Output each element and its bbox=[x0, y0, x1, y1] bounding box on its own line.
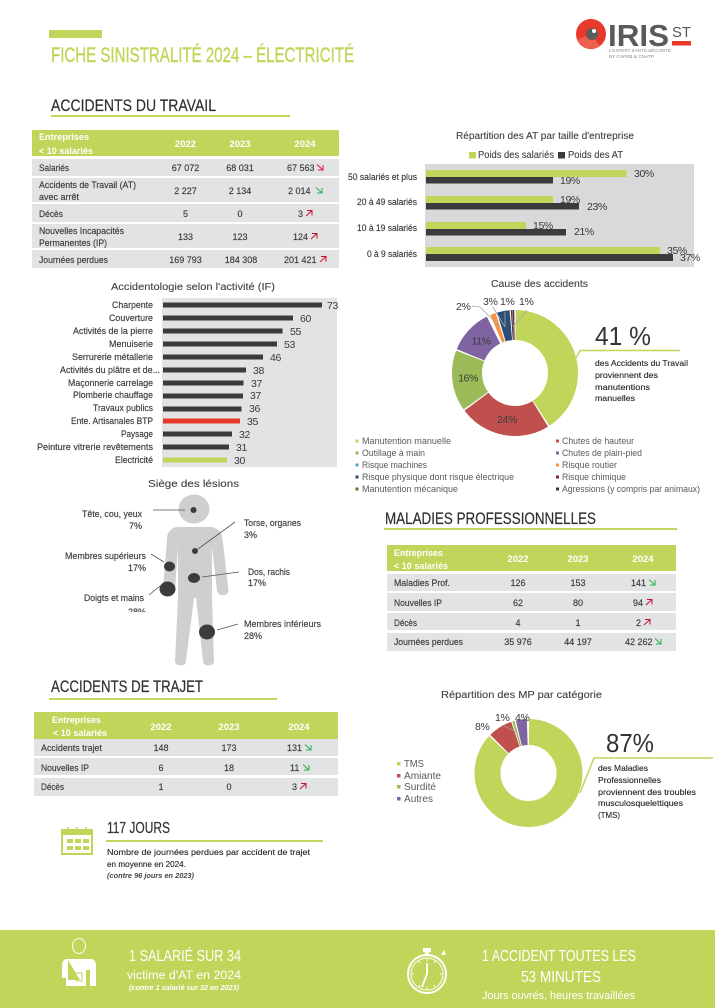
table: accidents du travail: 184 308 bbox=[225, 255, 257, 265]
table: accidents du travail: avec arrêt bbox=[39, 192, 79, 202]
chart: répartition des MP par catégorie: Répartition des MP par catégorie bbox=[441, 690, 602, 701]
chart: répartition des MP par catégorie: 8% bbox=[475, 721, 489, 733]
legend: cause des accidents: Manutention manuelle bbox=[362, 436, 451, 447]
table: maladies professionnelles: 2024 bbox=[632, 554, 654, 565]
heading: maladies professionnelles: MALADIES PROFESSIONNELLES bbox=[385, 510, 596, 528]
table: accidents de trajet: Nouvelles IP bbox=[41, 763, 89, 773]
footer band: 1 SALARIÉ SUR 34 bbox=[129, 946, 241, 965]
chart: cause des accidents: Cause des accidents bbox=[491, 279, 588, 290]
chart: accidentologie selon l'activité: Plomberie chauffage bbox=[73, 390, 153, 400]
diagram: siège des lésions: 28% bbox=[128, 607, 146, 617]
callout: 41 %: des Accidents du Travail bbox=[595, 358, 688, 368]
chart: accidentologie selon l'activité: 60 bbox=[300, 313, 311, 325]
table: maladies professionnelles: 1 bbox=[575, 618, 581, 628]
chart: répartition des AT par taille d'entreprise: 35% bbox=[667, 245, 687, 257]
legend: répartition des MP: Surdité bbox=[404, 781, 436, 793]
table: accidents du travail: 67 072 bbox=[172, 163, 199, 173]
chart: cause des accidents: 1% bbox=[500, 296, 514, 308]
table: accidents du travail: 124 bbox=[293, 232, 308, 242]
table: maladies professionnelles: 141 bbox=[631, 578, 646, 588]
callout: 87%: musculosquelettiques bbox=[598, 798, 683, 808]
chart: répartition des AT par taille d'entreprise bbox=[348, 131, 700, 267]
table: maladies professionnelles: 153 bbox=[570, 578, 586, 588]
legend: cause des accidents: Chutes de hauteur bbox=[562, 436, 634, 447]
footer band: victime d'AT en 2024 bbox=[127, 970, 242, 982]
chart: accidentologie selon l'activité: Travaux publics bbox=[93, 403, 153, 413]
diagram: siège des lésions: Siège des lésions bbox=[148, 479, 239, 490]
table: maladies professionnelles: 44 197 bbox=[564, 637, 592, 647]
legend: cause des accidents: Risque routier bbox=[562, 460, 617, 471]
table: accidents de trajet: Accidents trajet bbox=[41, 743, 102, 753]
table: maladies professionnelles bbox=[387, 545, 676, 651]
icon: stopwatch bbox=[408, 948, 446, 993]
diagram: siège des lésions: Membres inférieurs bbox=[244, 619, 321, 629]
chart: répartition des AT par taille d'entreprise: Poids des salariés bbox=[478, 150, 554, 161]
chart: accidentologie selon l'activité: Menuiserie bbox=[109, 339, 153, 349]
table: accidents du travail: 5 bbox=[183, 209, 188, 219]
table: maladies professionnelles: 80 bbox=[573, 598, 583, 608]
chart: accidentologie selon l'activité: Maçonnerie carrelage bbox=[68, 378, 153, 388]
diagram: siège des lésions: Torse, organes bbox=[244, 518, 301, 528]
table: accidents du travail: 0 bbox=[237, 209, 243, 219]
legend: cause des accidents: Risque physique dont risque électrique bbox=[362, 472, 514, 483]
table: accidents du travail: 133 bbox=[178, 232, 193, 242]
chart: répartition des AT par taille d'entreprise: 30% bbox=[634, 168, 654, 180]
table: maladies professionnelles: Décès bbox=[394, 618, 417, 628]
table: accidents de trajet: 2024 bbox=[288, 722, 310, 733]
legend: répartition des MP: TMS bbox=[404, 758, 424, 770]
diagram: siège des lésions: Tête, cou, yeux bbox=[82, 509, 142, 519]
table: accidents du travail: 2 227 bbox=[174, 186, 197, 196]
chart: répartition des AT par taille d'entreprise: 50 salariés et plus bbox=[348, 172, 417, 182]
chart: répartition des AT par taille d'entreprise: Répartition des AT par taille d'entreprise bbox=[456, 131, 634, 142]
table: accidents du travail: 2024 bbox=[294, 139, 316, 150]
table: accidents de trajet: 131 bbox=[287, 743, 302, 753]
table: maladies professionnelles: 2022 bbox=[507, 554, 529, 565]
callout: 117 jours: 117 JOURS bbox=[107, 820, 170, 837]
table: accidents du travail: Décès bbox=[39, 209, 63, 219]
table: accidents du travail: Entreprises bbox=[39, 132, 89, 143]
table: accidents de trajet bbox=[34, 712, 338, 796]
title bbox=[49, 30, 354, 67]
chart: cause des accidents: 3% bbox=[483, 296, 497, 308]
callout: 87%: proviennent des troubles bbox=[598, 787, 696, 797]
table: accidents de trajet: 2023 bbox=[218, 722, 240, 733]
table: maladies professionnelles: Nouvelles IP bbox=[394, 598, 442, 608]
table: accidents du travail: 169 793 bbox=[169, 255, 202, 265]
table: maladies professionnelles: < 10 salariés bbox=[394, 561, 448, 572]
chart: accidentologie selon l'activité: 30 bbox=[234, 455, 245, 467]
table: accidents du travail: 2 134 bbox=[229, 186, 251, 196]
table: accidents de trajet: 148 bbox=[153, 743, 169, 753]
table: accidents de trajet: Entreprises bbox=[52, 715, 101, 726]
table: accidents du travail bbox=[32, 130, 339, 268]
heading: accidents de trajet: ACCIDENTS DE TRAJET bbox=[51, 678, 203, 696]
chart: répartition des AT par taille d'entreprise: Poids des AT bbox=[568, 150, 623, 161]
callout: 41 %: manuelles bbox=[595, 393, 635, 403]
table: accidents de trajet: 3 bbox=[292, 782, 297, 792]
legend: cause des accidents: Chutes de plain-pied bbox=[562, 448, 642, 459]
callout: 117 jours: en moyenne en 2024. bbox=[107, 859, 186, 869]
chart: répartition des AT par taille d'entreprise: 10 à 19 salariés bbox=[357, 223, 417, 233]
callout: 41 % bbox=[576, 321, 688, 403]
footer band: 1 ACCIDENT TOUTES LES bbox=[482, 948, 636, 965]
diagram: siège des lésions: Dos, rachis bbox=[248, 567, 290, 577]
logo: IRIS ST: IRIS bbox=[608, 18, 669, 53]
chart: accidentologie selon l'activité: 35 bbox=[247, 416, 258, 428]
chart: accidentologie selon l'activité: 37 bbox=[250, 390, 261, 402]
chart: cause des accidents: 24% bbox=[497, 414, 517, 426]
chart: accidentologie selon l'activité: Peinture vitrerie revêtements bbox=[37, 442, 153, 452]
callout: 117 jours: (contre 96 jours en 2023) bbox=[107, 873, 195, 880]
chart: accidentologie selon l'activité: 53 bbox=[284, 339, 295, 351]
table: accidents du travail: Permanentes (IP) bbox=[39, 238, 107, 248]
table: maladies professionnelles: Entreprises bbox=[394, 548, 443, 559]
table: accidents du travail: 2 014 bbox=[288, 186, 311, 196]
table: maladies professionnelles: 2 bbox=[636, 618, 641, 628]
table: maladies professionnelles: 2023 bbox=[567, 554, 589, 565]
logo: IRIS ST bbox=[576, 18, 691, 59]
diagram: siège des lésions: 28% bbox=[244, 631, 262, 641]
chart: répartition des MP par catégorie: 4% bbox=[515, 712, 529, 724]
table: accidents du travail: Journées perdues bbox=[39, 255, 108, 265]
table: accidents du travail: Salariés bbox=[39, 163, 69, 173]
chart: répartition des AT par taille d'entreprise: 19% bbox=[560, 175, 580, 187]
chart: accidentologie selon l'activité: Couverture bbox=[109, 313, 153, 323]
heading: accidents du travail: ACCIDENTS DU TRAVAIL bbox=[51, 97, 216, 115]
chart: accidentologie selon l'activité bbox=[37, 282, 338, 467]
table: maladies professionnelles: 62 bbox=[513, 598, 523, 608]
table: maladies professionnelles: 4 bbox=[515, 618, 521, 628]
table: accidents du travail: 3 bbox=[298, 209, 303, 219]
chart: répartition des AT par taille d'entreprise: 23% bbox=[587, 201, 607, 213]
footer band bbox=[0, 930, 715, 1008]
chart: accidentologie selon l'activité: Electricité bbox=[115, 455, 153, 465]
legend: cause des accidents: Risque machines bbox=[362, 460, 427, 471]
table: accidents du travail: < 10 salariés bbox=[39, 146, 93, 157]
chart: répartition des AT par taille d'entreprise: 15% bbox=[533, 220, 553, 232]
table: accidents de trajet: 18 bbox=[224, 763, 234, 773]
diagram: siège des lésions: 17% bbox=[248, 578, 266, 588]
table: accidents de trajet: 1 bbox=[158, 782, 164, 792]
table: maladies professionnelles: 94 bbox=[633, 598, 643, 608]
legend: répartition des MP: Amiante bbox=[404, 770, 441, 782]
chart: répartition des AT par taille d'entreprise: 0 à 9 salariés bbox=[367, 249, 417, 259]
legend: cause des accidents: Risque chimique bbox=[562, 472, 626, 483]
chart: accidentologie selon l'activité: 31 bbox=[236, 442, 247, 454]
table: accidents de trajet: 0 bbox=[226, 782, 232, 792]
chart: accidentologie selon l'activité: 73 bbox=[327, 300, 338, 312]
chart: cause des accidents bbox=[456, 279, 588, 426]
callout: 41 %: proviennent des bbox=[595, 370, 658, 380]
chart: cause des accidents: 1% bbox=[519, 296, 533, 308]
table: accidents de trajet: 11 bbox=[290, 763, 299, 773]
chart: cause des accidents: 11% bbox=[471, 336, 491, 348]
table: maladies professionnelles: 126 bbox=[510, 578, 526, 588]
icon: body silhouette bbox=[163, 494, 228, 666]
callout: 87%: Professionnelles bbox=[598, 775, 661, 785]
chart: accidentologie selon l'activité: Ente. Artisanales BTP bbox=[71, 416, 153, 426]
callout: 41 %: manutentions bbox=[595, 382, 650, 392]
title: FICHE SINISTRALITÉ 2024 – ÉLECTRICITÉ bbox=[51, 44, 354, 67]
callout: 117 jours bbox=[106, 820, 323, 880]
logo: IRIS ST: ST bbox=[672, 24, 691, 41]
chart: accidentologie selon l'activité: 38 bbox=[253, 365, 264, 377]
chart: accidentologie selon l'activité: Accidentologie selon l'activité (IF) bbox=[111, 282, 275, 293]
footer band: 53 MINUTES bbox=[521, 969, 601, 986]
legend: cause des accidents: Agressions (y compris par animaux) bbox=[562, 484, 700, 495]
legend: cause des accidents bbox=[356, 436, 700, 495]
footer band: Jours ouvrés, heures travaillées bbox=[482, 990, 635, 1002]
chart: répartition des MP par catégorie bbox=[441, 690, 602, 814]
chart: accidentologie selon l'activité: 36 bbox=[249, 403, 260, 415]
chart: accidentologie selon l'activité: Activités de la pierre bbox=[73, 326, 153, 336]
diagram: siège des lésions: Membres supérieurs bbox=[65, 551, 146, 561]
icon: person with arm in sling bbox=[62, 938, 96, 986]
logo: IRIS ST: BY CAPEB & CNATP bbox=[609, 54, 654, 59]
chart: accidentologie selon l'activité: 37 bbox=[251, 378, 262, 390]
chart: accidentologie selon l'activité: 46 bbox=[270, 352, 281, 364]
table: accidents de trajet: 2022 bbox=[150, 722, 172, 733]
table: accidents de trajet: < 10 salariés bbox=[53, 728, 107, 739]
chart: accidentologie selon l'activité: Serrurerie métallerie bbox=[72, 352, 153, 362]
table: accidents du travail: 2023 bbox=[229, 139, 251, 150]
table: accidents de trajet: 173 bbox=[221, 743, 237, 753]
chart: répartition des AT par taille d'entreprise: 37% bbox=[680, 252, 700, 264]
chart: répartition des MP par catégorie: 1% bbox=[495, 712, 509, 724]
diagram: siège des lésions: Doigts et mains bbox=[84, 593, 144, 603]
chart: cause des accidents: 2% bbox=[456, 301, 470, 313]
chart: cause des accidents: 16% bbox=[458, 372, 478, 384]
diagram: siège des lésions bbox=[65, 479, 321, 666]
callout: 41 %: 41 % bbox=[595, 321, 651, 351]
chart: accidentologie selon l'activité: Charpente bbox=[112, 300, 153, 310]
chart: accidentologie selon l'activité: 32 bbox=[239, 429, 250, 441]
table: accidents du travail: 201 421 bbox=[284, 255, 317, 265]
legend: répartition des MP bbox=[397, 758, 441, 805]
logo: IRIS ST: L'EXPERT SANTÉ-SÉCURITÉ bbox=[609, 47, 671, 53]
callout: 87%: 87% bbox=[606, 728, 654, 758]
legend: cause des accidents: Manutention mécanique bbox=[362, 484, 458, 495]
icon: calendar bbox=[61, 827, 93, 854]
chart: accidentologie selon l'activité: Activités du plâtre et de... bbox=[60, 365, 160, 375]
chart: répartition des AT par taille d'entreprise: 19% bbox=[560, 194, 580, 206]
callout: 87%: des Maladies bbox=[598, 763, 648, 773]
footer band: (contre 1 salarié sur 32 en 2023) bbox=[129, 985, 240, 992]
callout: 117 jours: Nombre de journées perdues par accident de trajet bbox=[107, 847, 311, 857]
chart: accidentologie selon l'activité: 55 bbox=[290, 326, 301, 338]
legend: cause des accidents: Outillage à main bbox=[362, 448, 425, 459]
table: maladies professionnelles: Maladies Prof. bbox=[394, 578, 450, 588]
chart: répartition des AT par taille d'entreprise: 20 à 49 salariés bbox=[357, 197, 417, 207]
table: accidents de trajet: 6 bbox=[158, 763, 164, 773]
table: maladies professionnelles: Journées perdues bbox=[394, 637, 463, 647]
chart: accidentologie selon l'activité: Paysage bbox=[121, 429, 153, 439]
diagram: siège des lésions: 7% bbox=[129, 521, 142, 531]
table: maladies professionnelles: 35 976 bbox=[504, 637, 532, 647]
table: accidents du travail: Accidents de Travail (AT) bbox=[39, 180, 136, 190]
table: accidents du travail: 67 563 bbox=[287, 163, 315, 173]
table: accidents du travail: 2022 bbox=[175, 139, 196, 150]
table: accidents du travail: 123 bbox=[232, 232, 248, 242]
chart: répartition des AT par taille d'entreprise: 21% bbox=[574, 226, 594, 238]
callout: 87%: (TMS) bbox=[598, 810, 620, 820]
legend: répartition des MP: Autres bbox=[404, 793, 433, 805]
table: accidents de trajet: Décès bbox=[41, 782, 64, 792]
diagram: siège des lésions: 3% bbox=[244, 530, 257, 540]
table: maladies professionnelles: 42 262 bbox=[625, 637, 653, 647]
callout: 87% bbox=[580, 728, 713, 820]
diagram: siège des lésions: 17% bbox=[128, 563, 146, 573]
table: accidents du travail: Nouvelles Incapacités bbox=[39, 226, 124, 236]
table: accidents du travail: 68 031 bbox=[226, 163, 254, 173]
